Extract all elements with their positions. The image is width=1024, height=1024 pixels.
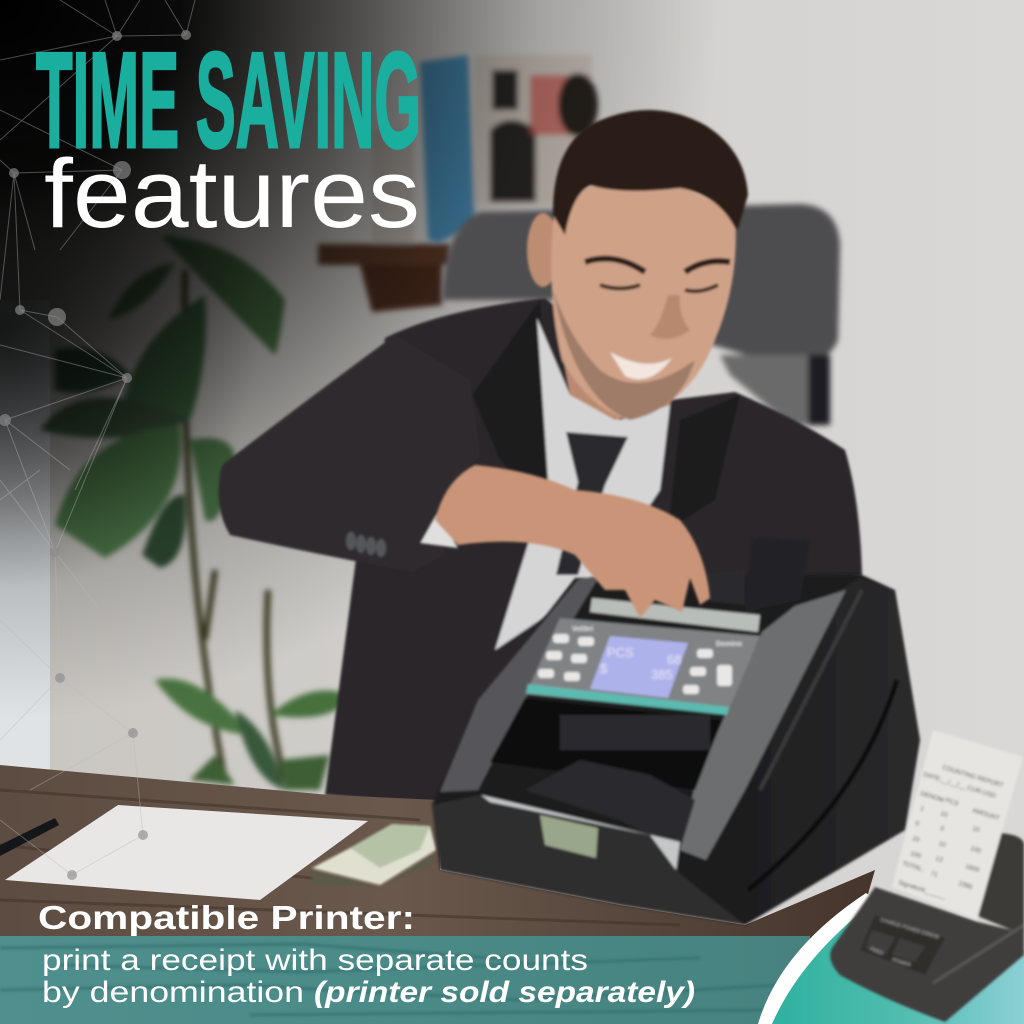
sheet of paper [5, 805, 368, 900]
control panel: Domino [716, 641, 742, 648]
caption heading: Compatible Printer: [38, 899, 415, 936]
face [551, 180, 736, 420]
eyes and brows [585, 259, 730, 272]
receipt printer [830, 730, 1024, 1022]
front hopper [432, 795, 745, 925]
receipt text: 1 [919, 805, 925, 813]
blurred shelf with books and magazine [318, 55, 598, 312]
printer button panel: CHARGE POWER ERROR [879, 917, 940, 941]
paper guide tray [745, 538, 810, 612]
machine body [432, 574, 920, 925]
vase [372, 130, 414, 244]
jacket lapel shadow [472, 300, 740, 530]
desk wood surface [0, 765, 875, 1024]
network lines decoration [0, 0, 195, 875]
eyelids [600, 285, 718, 291]
books [420, 55, 475, 242]
side panel [700, 578, 920, 925]
caption note: (printer sold separately) [314, 976, 695, 1009]
dark left edge [0, 70, 260, 590]
receipt text: 100 [909, 850, 922, 860]
receipt text: 0 [939, 825, 945, 833]
title line: features: features [44, 139, 420, 248]
transport rollers [525, 715, 710, 850]
title [36, 24, 421, 248]
infographic scene: TIME SAVING [36, 24, 421, 176]
panel buttons [538, 634, 732, 694]
stems [184, 270, 285, 780]
note path interior [490, 698, 722, 790]
receipt text: 71 [929, 870, 939, 879]
office chair [442, 204, 840, 425]
caption text [38, 899, 695, 1009]
receipt text: 10 [971, 825, 981, 834]
neck [553, 300, 680, 420]
printer rear cover [975, 833, 1024, 935]
sleeve buttons [346, 532, 386, 557]
receipt text: 5 [914, 820, 920, 828]
tie [556, 432, 628, 575]
money counter machine [432, 538, 920, 925]
receipt text: 1600 [964, 863, 981, 874]
receipt text: Signature______ [897, 879, 947, 901]
printer front edge [933, 925, 1024, 983]
dark top-left vignette [0, 0, 760, 760]
control panel [526, 618, 760, 715]
top deck [700, 570, 745, 605]
mouth smile [610, 352, 672, 379]
magazine [474, 55, 598, 205]
receipt text: COUNTING REPORT [941, 764, 1004, 789]
network nodes [0, 30, 191, 880]
shirt cuff [420, 513, 458, 548]
receipt text: AMOUNT [971, 807, 1000, 822]
note stack on top [590, 598, 760, 632]
nose shadow [650, 295, 690, 339]
receipt text: DENOM [919, 790, 945, 804]
jacket sleeve [218, 335, 480, 572]
teal strip [526, 684, 729, 715]
shelf [318, 244, 450, 312]
LCD screen: 68 [667, 652, 681, 667]
receipt paper [892, 730, 1023, 920]
jacket body [325, 298, 862, 805]
brand labels: Volibri [572, 626, 593, 633]
receipt text: 100 [969, 845, 982, 855]
forearm and hand over machine [420, 465, 710, 618]
left pillar [440, 575, 600, 792]
receipt text [897, 764, 1004, 901]
businessman [218, 110, 862, 805]
arm [435, 465, 710, 618]
shirt [495, 318, 670, 650]
caption line 2: by denomination [42, 976, 304, 1009]
receipt text: 10 [937, 840, 947, 849]
pen [0, 818, 59, 856]
ear [527, 213, 559, 287]
side ridge [760, 590, 862, 790]
printer button panel [860, 915, 945, 975]
plant [40, 235, 350, 790]
LCD screen: PCS [607, 645, 634, 660]
receipt text: 13 [934, 855, 944, 864]
hair [553, 110, 748, 235]
receipt text: 10 [939, 810, 949, 819]
white arc [758, 893, 885, 1024]
banknote stack [312, 824, 436, 888]
receipt text: 20 [911, 835, 921, 844]
printer body [830, 887, 1024, 1022]
leaves [40, 235, 350, 790]
caption line 1: print a receipt with separate counts [42, 944, 588, 977]
receipt text: 2390 [957, 880, 974, 891]
printer button panel: POWER [891, 957, 912, 969]
window strip [0, 300, 50, 770]
LCD screen: $ [600, 661, 608, 676]
right pillar [680, 590, 846, 860]
receipt text: PCS [944, 797, 960, 808]
side arc [748, 680, 897, 890]
receipt text: DATE:__/__/__ CUR:USD [922, 771, 997, 800]
LCD screen: 385 [651, 667, 673, 682]
receipt text: TOTAL: [901, 860, 925, 873]
beard shadow [553, 290, 695, 420]
teal banner band [0, 936, 810, 1024]
aqua corner [772, 905, 1024, 1024]
printer button panel: FEED [869, 946, 884, 957]
LCD screen [590, 636, 688, 698]
